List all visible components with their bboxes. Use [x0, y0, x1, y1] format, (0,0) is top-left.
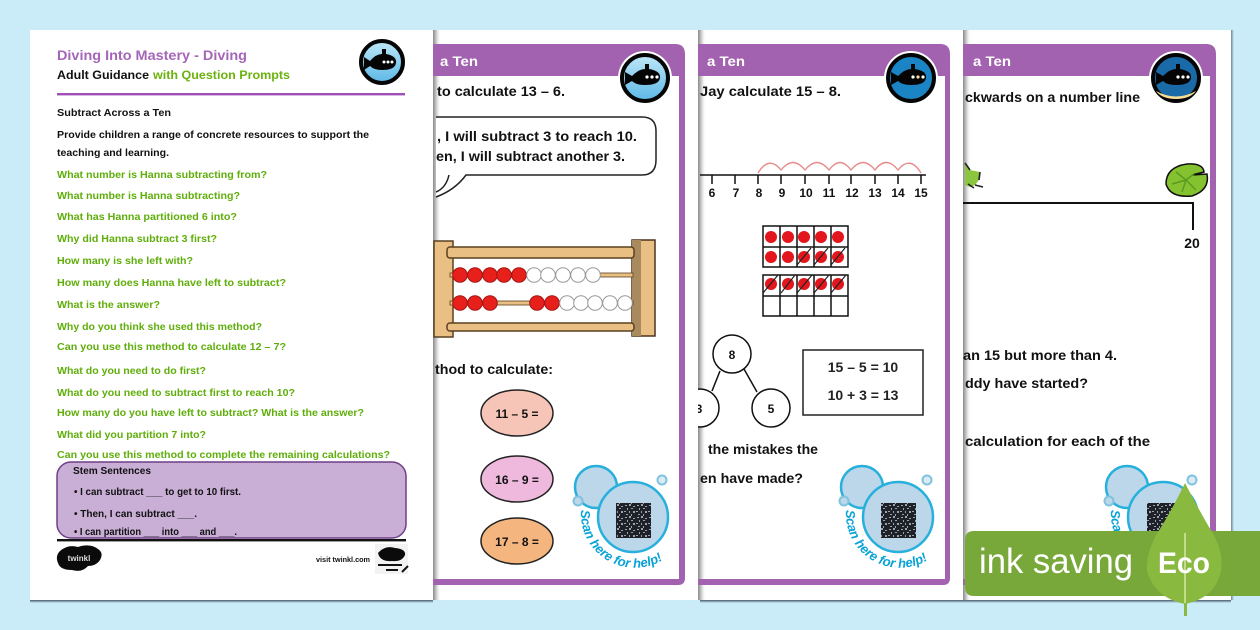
stem sentences box: • I can partition ___ into ___ and ___. — [74, 526, 237, 538]
number line with jumps: 8 — [756, 186, 763, 200]
calculation oval: 17 - 8 — [481, 518, 553, 564]
badge: submarine on light blue — [618, 51, 672, 105]
question prompts: What has Hanna partitioned 6 into? — [57, 211, 237, 223]
page frame — [698, 44, 950, 585]
QR bubbles — [1104, 464, 1198, 531]
panel: worksheet page 1 (abacus and calculations) — [433, 30, 698, 600]
stem sentences box — [57, 462, 406, 538]
banner text: ink saving — [979, 542, 1133, 581]
page frame — [433, 44, 685, 585]
question prompts: How many does Hanna have left to subtract? — [57, 277, 286, 289]
QR bubbles — [572, 464, 670, 568]
part-whole model: 3 — [696, 402, 703, 416]
subtitle accent: with Question Prompts — [152, 68, 290, 82]
calculation box — [803, 350, 923, 415]
number line with jumps: 14 — [891, 186, 905, 200]
abacus — [434, 240, 655, 337]
ten frames with crossed counters — [763, 226, 848, 316]
icon: lily pad — [1166, 164, 1207, 196]
question prompts: How many is she left with? — [57, 255, 193, 267]
question prompts: What is the answer? — [57, 299, 160, 311]
calculation oval: 17 - 8: 17 – 8 = — [495, 535, 539, 549]
speech bubble: en, I will subtract another 3. — [436, 148, 625, 164]
label: 20: 20 — [1184, 235, 1200, 251]
question prompts: How many do you have left to subtract? What is the answer? — [57, 407, 364, 419]
page frame — [963, 44, 1216, 585]
QR bubbles: Scan here for help! — [580, 510, 662, 568]
calculation oval: 11 - 5: 11 – 5 = — [495, 407, 539, 421]
panel: worksheet page 3 (number line and frog) — [700, 30, 1234, 603]
question prompts: Can you use this method to calculate 12 – 7? — [57, 341, 286, 353]
question prompts: What number is Hanna subtracting from? — [57, 169, 267, 181]
question prompts: What number is Hanna subtracting? — [57, 190, 240, 202]
number line with jumps: 11 — [823, 186, 836, 200]
number line with jumps: 7 — [733, 186, 740, 200]
number line with jumps: 9 — [779, 186, 786, 200]
twinkl membership logo — [375, 544, 408, 574]
QR bubbles: Scan here for help! — [1110, 510, 1120, 531]
guidance text: teaching and learning. — [57, 147, 169, 159]
footer rule — [57, 539, 406, 541]
number line with jumps — [700, 162, 928, 200]
section heading: Subtract Across a Ten — [57, 107, 171, 119]
question text: en have made? — [700, 470, 803, 486]
question text: to calculate 13 – 6. — [437, 83, 565, 99]
calculation oval: 11 - 5 — [481, 390, 553, 436]
heading rule — [57, 93, 405, 95]
number line — [963, 203, 1193, 230]
question text: ckwards on a number line — [965, 89, 1140, 105]
number line with jumps: 10 — [799, 186, 813, 200]
question text: the mistakes the — [708, 441, 818, 457]
header label: a Ten — [707, 54, 745, 69]
question prompts: What do you need to do first? — [57, 365, 206, 377]
calculation box: 15 – 5 = 10 — [828, 359, 898, 375]
icon: frog — [965, 163, 983, 188]
part-whole model: 5 — [768, 402, 775, 416]
guidance text: Provide children a range of concrete resources to support the — [57, 129, 369, 141]
calculation oval: 16 - 9: 16 – 9 = — [495, 473, 539, 487]
question prompts: What did you partition 7 into? — [57, 429, 206, 441]
stem sentences box: • I can subtract ___ to get to 10 first. — [74, 486, 241, 498]
eco badge: ink saving banner — [965, 483, 1260, 616]
number line with jumps: 6 — [709, 186, 716, 200]
question text: Jay calculate 15 – 8. — [700, 83, 841, 99]
badge: submarine on blue — [884, 51, 938, 105]
header label: a Ten — [973, 54, 1011, 69]
calculation oval: 16 - 9 — [481, 456, 553, 502]
icon: leaf — [1147, 483, 1222, 616]
title: Diving Into Mastery - Diving — [57, 47, 247, 63]
part-whole model — [681, 335, 790, 427]
subtitle: Adult Guidance — [57, 68, 149, 82]
twinkl logo — [57, 545, 102, 571]
question prompts: Can you use this method to complete the remaining calculations? — [57, 449, 390, 461]
QR bubbles — [838, 464, 934, 568]
question prompts: Why did Hanna subtract 3 first? — [57, 233, 217, 245]
QR bubbles: Scan here for help! — [846, 510, 926, 568]
speech bubble: , I will subtract 3 to reach 10. — [437, 128, 637, 144]
header label: a Ten — [440, 54, 478, 69]
guidance text — [57, 129, 369, 159]
number line with jumps: 13 — [868, 186, 882, 200]
speech bubble — [436, 117, 656, 197]
badge: submarine — [361, 41, 403, 83]
stem sentences box: Stem Sentences — [73, 465, 151, 477]
question text: thod to calculate: — [435, 361, 553, 377]
twinkl logo: twinkl — [68, 554, 90, 563]
question text: an 15 but more than 4. — [963, 347, 1117, 363]
question prompts: What do you need to subtract first to reach 10? — [57, 387, 295, 399]
question text: calculation for each of the — [965, 433, 1150, 449]
calculation box: 10 + 3 = 13 — [828, 387, 899, 403]
question prompts — [57, 169, 390, 461]
badge: submarine on deep blue — [1149, 51, 1203, 105]
panel: adult guidance sheet — [30, 30, 433, 603]
stem sentences box: • Then, I can subtract ___. — [74, 508, 197, 520]
panel: worksheet page 2 (number line and ten frames) — [696, 30, 960, 600]
part-whole model: 8 — [729, 348, 736, 362]
question text: ddy have started? — [965, 375, 1088, 391]
number line with jumps: 12 — [845, 186, 859, 200]
number line with jumps: 15 — [914, 186, 928, 200]
question prompts: Why do you think she used this method? — [57, 321, 262, 333]
footer link: visit twinkl.com — [316, 557, 370, 564]
eco label: Eco — [1158, 547, 1210, 580]
